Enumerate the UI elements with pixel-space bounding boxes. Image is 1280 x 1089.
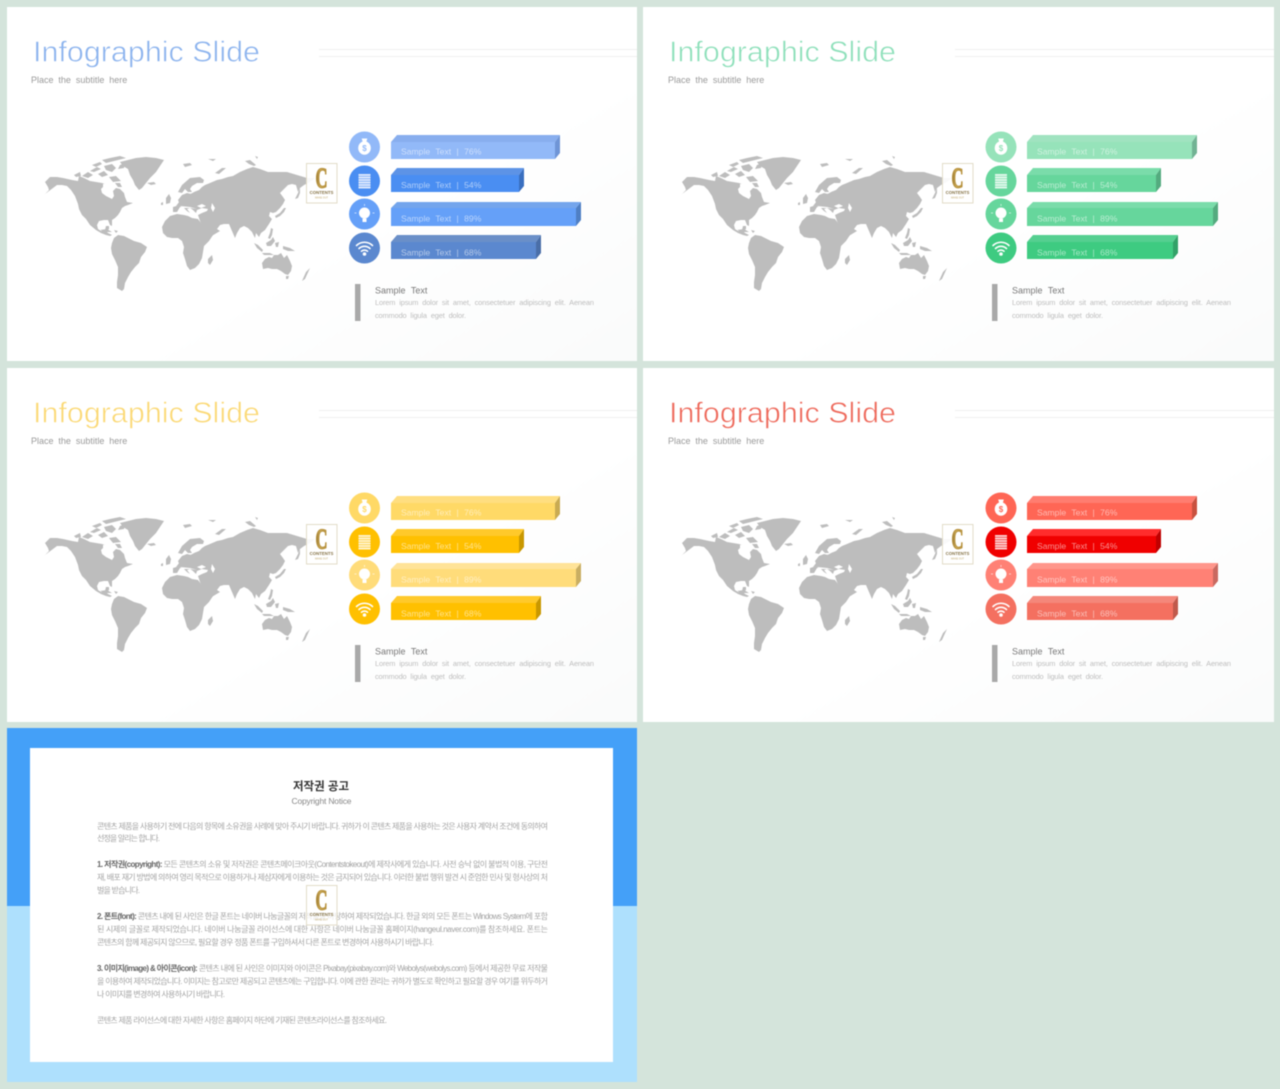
bar row 4: Sample Text | 68% [401, 608, 482, 618]
slide 1: blue [7, 7, 637, 361]
bar row 3: Sample Text | 89% [401, 214, 482, 224]
white card [30, 748, 613, 1062]
logo badge [306, 884, 337, 925]
bar row 1: $ [362, 505, 367, 514]
bar row 2 [349, 526, 524, 558]
logo badge: MAKE OUT [315, 196, 328, 200]
bar row 3 [986, 198, 1218, 230]
logo badge: CONTENTS [310, 912, 333, 917]
subtitle: Place the subtitle here [31, 436, 127, 446]
logo badge [306, 524, 337, 564]
note text: Sample Text [375, 646, 428, 656]
subtitle: Place the subtitle here [31, 75, 127, 85]
bar row 2 [986, 166, 1161, 196]
bar row 1: Sample Text | 76% [1037, 146, 1118, 156]
panel background [7, 368, 637, 722]
note marker [992, 284, 998, 321]
world map [42, 517, 315, 652]
title: Infographic Slide [33, 398, 260, 430]
logo badge: MAKE OUT [951, 558, 964, 560]
bar row 1: Sample Text | 76% [1037, 508, 1118, 518]
logo badge: MAKE OUT [315, 558, 328, 560]
bar row 1: Sample Text | 76% [401, 508, 482, 518]
world map [679, 156, 952, 291]
note text [375, 646, 594, 681]
bar row 3: Sample Text | 89% [401, 574, 482, 584]
panel background [7, 7, 637, 361]
logo badge: CONTENTS [310, 190, 333, 195]
notice subheading: Copyright Notice [292, 796, 352, 806]
logo badge: C [316, 524, 328, 556]
bar row 3: Sample Text | 89% [1037, 214, 1118, 224]
note text: Lorem ipsum dolor sit amet, consectetuer adipiscing elit. Aenean [1012, 659, 1231, 668]
notice heading: 저작권 공고 [293, 779, 349, 793]
bar row 4 [349, 594, 541, 624]
logo badge: C [316, 884, 328, 916]
panel background [643, 7, 1274, 361]
note text: Sample Text [1012, 286, 1065, 296]
note text: commodo ligula eget dolor. [1012, 672, 1103, 681]
slide 2: green [643, 7, 1274, 361]
notice body text: 2. 폰트(font): 콘텐츠 내에 된 사인은 한글 폰트는 네이버 나눔글꼴의 저작물을 바탕하여 제작되었습니다. 한글 외의 모든 폰트는 Windows System에 포함 [97, 911, 549, 921]
bar row 4: Sample Text | 68% [1037, 608, 1118, 618]
logo badge: MAKE OUT [315, 918, 328, 922]
bar row 1 [986, 132, 1197, 162]
bar row 4: Sample Text | 68% [1037, 248, 1118, 258]
bar row 1: $ [362, 144, 367, 153]
logo badge [306, 162, 337, 203]
note text: Sample Text [375, 286, 428, 296]
notice body text: 콘텐츠 제품 라이선스에 대한 자세한 사항은 홈페이지 하단에 기재된 콘텐츠라이선스를 참조하세요. [97, 1015, 387, 1025]
logo badge: MAKE OUT [951, 196, 964, 200]
note text [375, 286, 594, 320]
bar row 4 [986, 232, 1178, 264]
title: Infographic Slide [669, 36, 896, 68]
bar row 2: Sample Text | 54% [1037, 541, 1118, 551]
bar row 1 [349, 132, 560, 162]
bar row 4: Sample Text | 68% [401, 248, 482, 258]
panel background [643, 368, 1274, 722]
notice body text: 을 이용하여 제작되었습니다. 이미지는 참고로만 제공되고 콘텐츠에는 구입합니다. 이에 관한 권리는 귀하가 별도로 확인하고 필요할 경우 여기를 위두하거 [97, 976, 548, 986]
panel: copyright notice [7, 728, 637, 1082]
bar row 1 [986, 492, 1197, 524]
logo badge: C [316, 162, 328, 194]
logo badge: CONTENTS [946, 551, 969, 556]
title: Infographic Slide [669, 398, 896, 430]
logo badge: CONTENTS [946, 190, 969, 195]
logo badge: C [952, 162, 964, 194]
logo badge [942, 524, 973, 564]
notice body text: 콘텐츠의 함께 제공되지 않으므로, 필요할 경우 정품 폰트를 구입하셔서 다른 폰트로 변경하여 사용하시기 바랍니다. [97, 937, 434, 947]
bar row 4 [986, 594, 1178, 624]
note text [1012, 646, 1231, 681]
slide 3: yellow [7, 368, 637, 722]
notice body text: 선정을 알리는 합니다. [97, 833, 160, 843]
bar row 1: $ [999, 144, 1004, 153]
bar row 3: Sample Text | 89% [1037, 574, 1118, 584]
notice body text: 된 시제의 글꼴로 제작되었습니다. 네이버 나눔글꼴 라이선스에 대한 사항은 네이버 나눔글꼴 홈페이지(hangeul.naver.com)를 참조하세요. 폰트는 [97, 924, 548, 934]
subtitle: Place the subtitle here [668, 436, 764, 446]
note text: Lorem ipsum dolor sit amet, consectetuer adipiscing elit. Aenean [375, 659, 594, 668]
note marker [355, 284, 360, 321]
bar row 1: Sample Text | 76% [401, 146, 482, 156]
bar row 2 [986, 526, 1161, 558]
note text: commodo ligula eget dolor. [375, 672, 466, 681]
bar row 1: $ [999, 505, 1004, 514]
light blue lower band [7, 906, 637, 1082]
world map [42, 156, 315, 291]
notice body text [97, 821, 549, 1025]
notice body text: 1. 저작권(copyright): 모든 콘텐츠의 소유 및 저작권은 콘텐츠메이크아웃(Contentstokeout)에 제작사에게 있습니다. 사전 승낙 없이 불법적 이용, 구단전 [97, 859, 548, 869]
notice body text: 콘텐츠 제품을 사용하기 전에 다음의 항목에 소유권을 사례에 맞아 주시기 바랍니다. 귀하가 이 콘텐츠 제품을 사용하는 것은 사용자 계약서 조건에 동의하여 [97, 821, 548, 831]
bar row 2: Sample Text | 54% [401, 180, 482, 190]
title: Infographic Slide [33, 36, 260, 68]
note marker [992, 645, 998, 682]
bar row 2 [349, 166, 524, 196]
note text: Sample Text [1012, 646, 1065, 656]
logo badge: C [952, 524, 964, 556]
bar row 2: Sample Text | 54% [401, 541, 482, 551]
subtitle: Place the subtitle here [668, 75, 764, 85]
bar row 1 [349, 492, 560, 524]
bar row 3 [349, 198, 581, 230]
notice body text: 3. 이미지(image) & 아이콘(icon): 콘텐츠 내에 된 사인은 이미지와 아이콘은 Pixabay(pixabay.com)와 Webolys(webolys.com) 등에서 제공한 무료 저작물 [97, 963, 548, 973]
note text: Lorem ipsum dolor sit amet, consectetuer adipiscing elit. Aenean [375, 298, 594, 307]
note text: commodo ligula eget dolor. [375, 311, 466, 320]
bar row 3 [986, 560, 1218, 590]
note text: Lorem ipsum dolor sit amet, consectetuer adipiscing elit. Aenean [1012, 298, 1231, 307]
note text: commodo ligula eget dolor. [1012, 311, 1103, 320]
blue upper band [7, 728, 637, 906]
bar row 2: Sample Text | 54% [1037, 180, 1118, 190]
bar row 3 [349, 560, 581, 590]
notice body text: 벌을 받습니다. [97, 885, 140, 895]
slide 4: red [643, 368, 1274, 722]
notice body text: 재, 배포 재기 방법에 의하여 영리 목적으로 이용하거나 제삼자에게 이용하는 것은 금지되어 있습니다. 이러한 불법 행위 발견 시 준엄한 민사 및 형사상의 처 [97, 872, 548, 882]
notice body text: 나 이미지를 변경하여 사용하시기 바랍니다. [97, 989, 225, 999]
logo badge: CONTENTS [310, 551, 333, 556]
logo badge [942, 162, 973, 203]
world map [679, 517, 952, 652]
bar row 4 [349, 232, 541, 264]
note marker [355, 645, 360, 682]
note text [1012, 286, 1231, 320]
